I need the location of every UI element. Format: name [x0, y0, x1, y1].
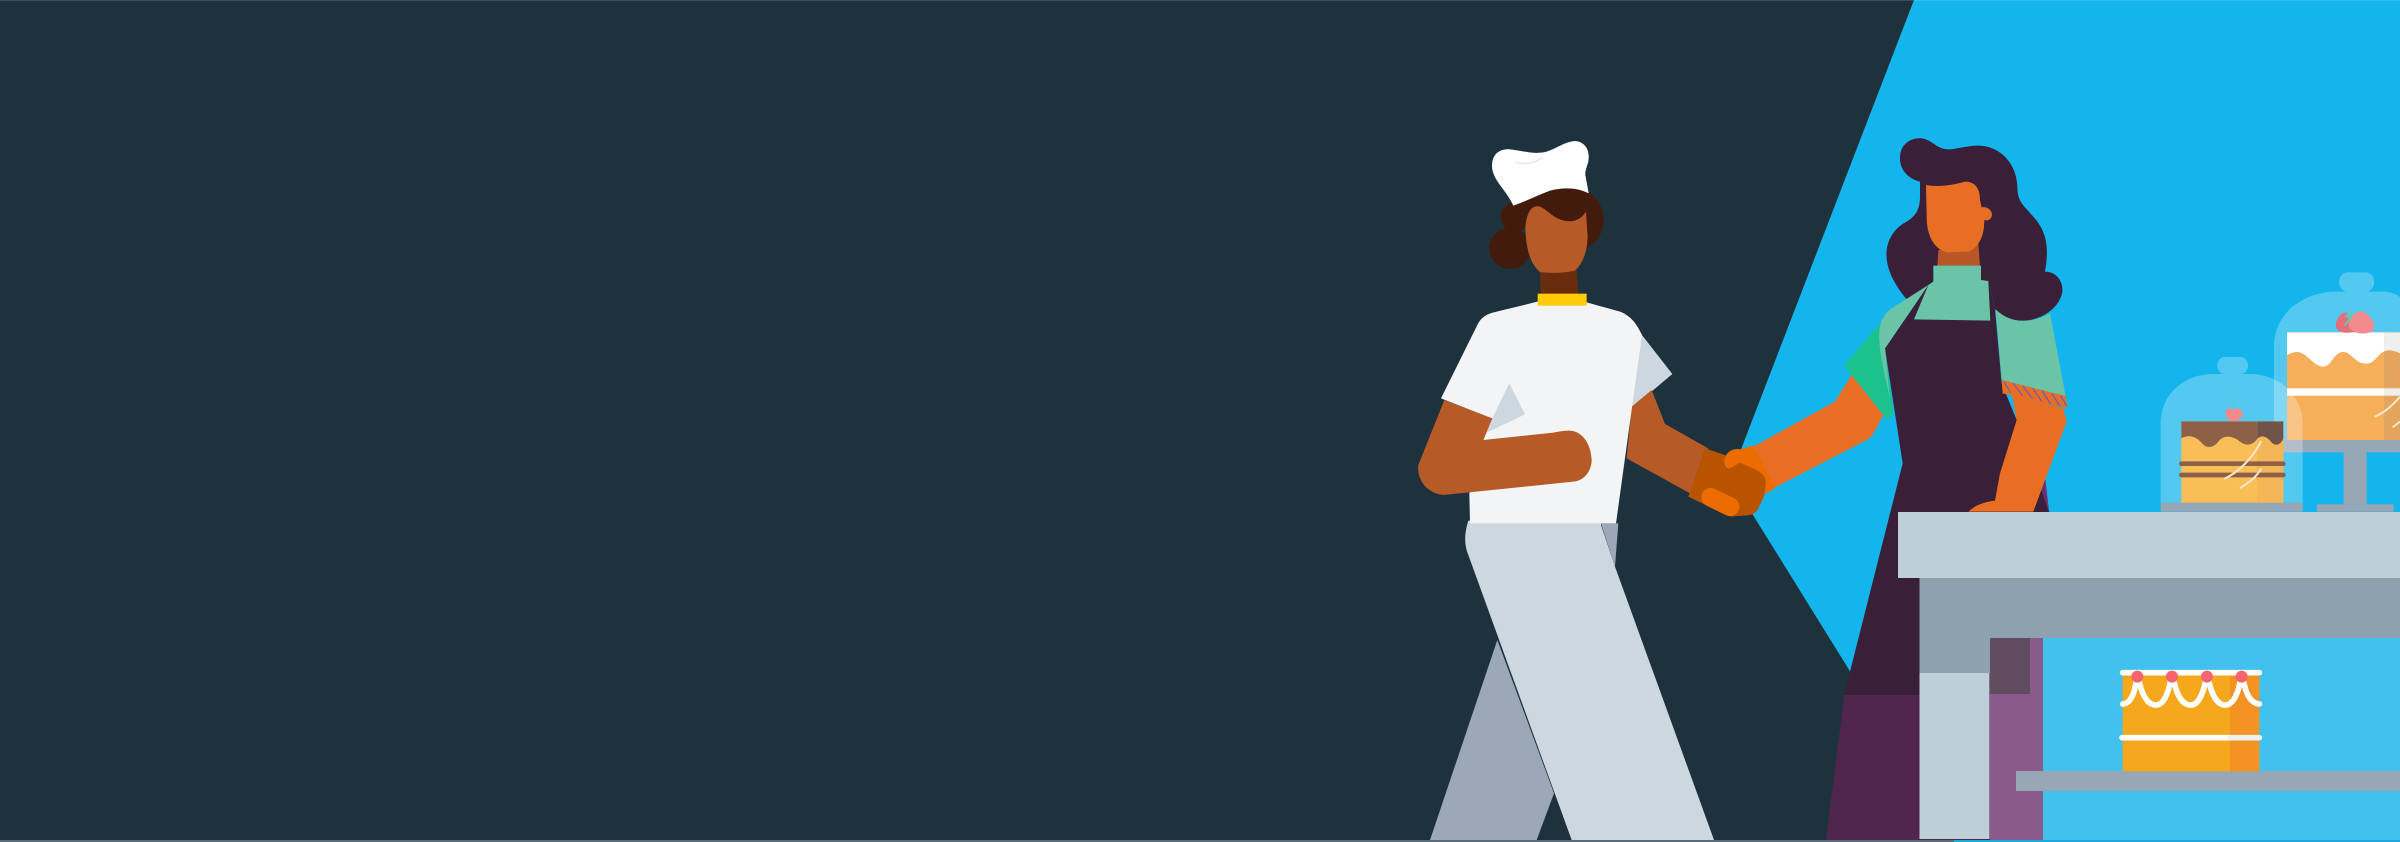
bottom edge line, blue side — [1954, 840, 2400, 842]
back sleeve — [1627, 333, 1672, 408]
yellow collar — [1538, 294, 1587, 306]
hair — [1886, 138, 2062, 321]
chef baker — [1418, 141, 1883, 840]
hair — [1489, 187, 1604, 269]
counter — [1898, 512, 2400, 840]
woman customer — [1826, 138, 2068, 841]
clasped hand — [1688, 448, 1766, 517]
jacket fold — [1485, 383, 1525, 433]
sliver of purple at the hip — [2033, 477, 2049, 513]
trousers shadow at waist — [1601, 523, 1618, 567]
cake body — [2123, 675, 2230, 771]
mint strap — [1879, 285, 1928, 400]
green sleeve — [1844, 322, 1893, 420]
shelf — [2016, 771, 2400, 791]
woman's arm — [1753, 375, 1883, 488]
bottom edge line, dark side — [0, 840, 1954, 842]
striped cuff — [2002, 380, 2068, 408]
counter top — [1898, 512, 2400, 578]
folded arm — [1418, 400, 1592, 495]
cake shaded side — [2230, 675, 2259, 771]
upper finger — [1724, 449, 1748, 468]
small chocolate cake under dome — [2161, 357, 2303, 512]
glass dome, small — [2161, 357, 2303, 503]
glass dome, large — [2274, 272, 2400, 440]
counter frame — [1920, 578, 2400, 673]
cake layers — [2181, 421, 2283, 503]
lower finger — [1711, 497, 1730, 507]
cherry — [2225, 398, 2243, 421]
face — [1926, 182, 1992, 252]
orange cake on shelf — [2122, 671, 2259, 771]
sugar pearls — [2131, 671, 2248, 683]
extended arm — [1627, 390, 1708, 493]
front trouser leg — [1465, 521, 1714, 840]
right arm — [1968, 393, 2067, 512]
stand — [2283, 440, 2400, 512]
neck — [1540, 270, 1578, 295]
strawberry — [2336, 311, 2374, 333]
icing — [2122, 672, 2259, 738]
counter leg — [1920, 673, 1990, 839]
skirt — [1826, 694, 2053, 841]
woman's left sleeve — [1844, 285, 1928, 420]
large cake — [2287, 332, 2400, 440]
cake base plate — [2161, 503, 2303, 512]
neck — [1937, 243, 1980, 267]
face — [1525, 206, 1588, 273]
purple seen through counter — [1990, 638, 2043, 840]
background: bright blue wedge — [1730, 0, 2400, 842]
top edge line — [0, 0, 2400, 1]
cake stand with large strawberry cake under dome — [2274, 272, 2400, 512]
right sleeve — [1996, 309, 2066, 396]
darker purple square — [1990, 638, 2030, 694]
woman's hand — [1740, 445, 1775, 494]
chef hat — [1492, 141, 1589, 206]
chef jacket — [1441, 302, 1642, 523]
counter recess background — [2043, 638, 2400, 840]
torso and apron — [1844, 285, 2049, 695]
rear leg — [1430, 640, 1554, 840]
turtleneck — [1914, 266, 1990, 321]
